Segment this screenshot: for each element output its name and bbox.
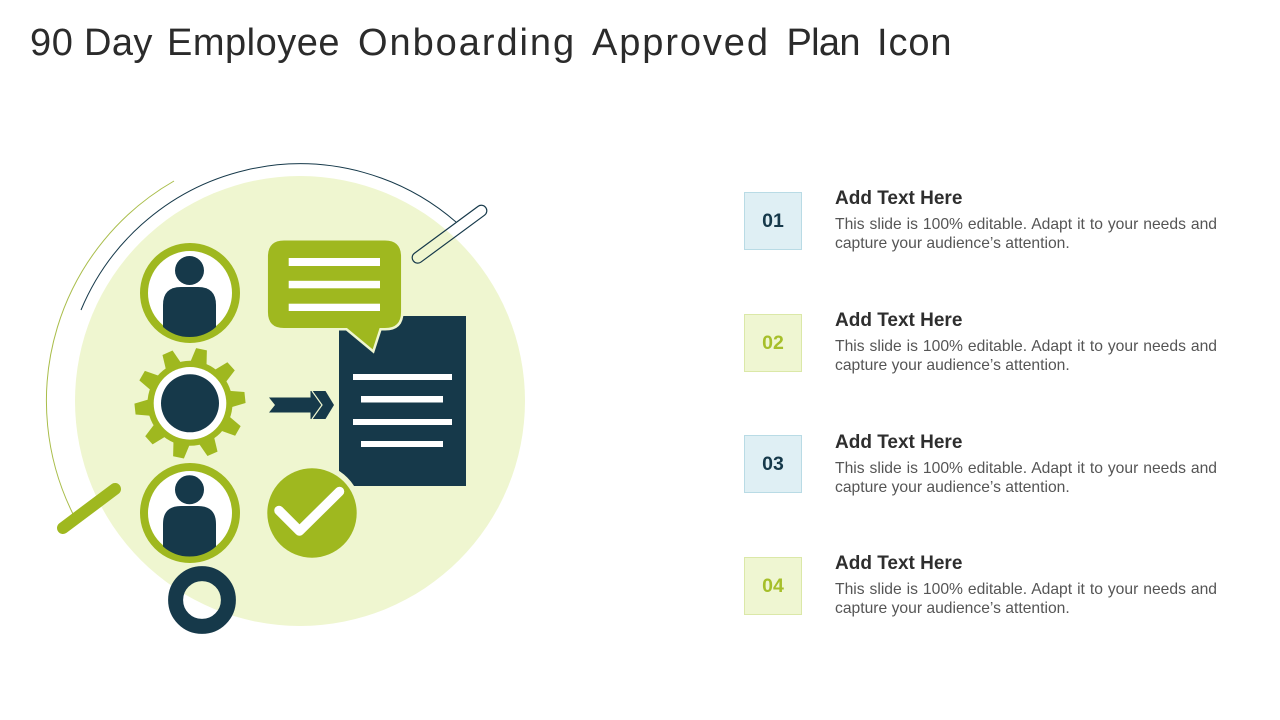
text block 04: capture your audience’s attention. [835,600,1070,617]
document [339,316,466,486]
text block 03: This slide is 100% editable. Adapt it to your needs and [835,460,1217,477]
outer navy arc [81,164,456,310]
title: Approved [592,22,770,64]
text block 03: Add Text Here [835,432,962,453]
number box 02: 02 [762,332,784,354]
navy ring [176,574,228,626]
number box 03: 03 [762,453,784,475]
text block 03 [835,432,1217,496]
title: Day [84,22,153,64]
illustration: onboarding plan icon [46,163,525,634]
outer green arc [46,181,174,514]
text block 01: This slide is 100% editable. Adapt it to your needs and [835,216,1217,233]
number box 02 [744,314,802,372]
text block 01: capture your audience’s attention. [835,235,1070,252]
check badge [262,463,362,563]
text block 03: capture your audience’s attention. [835,479,1070,496]
number box 04: 04 [762,575,784,597]
title: Employee [167,22,340,64]
green capsule [63,489,115,528]
number box 01: 01 [762,210,784,232]
person icon top [144,247,236,339]
person icon bottom [144,467,236,559]
background circle [75,176,525,626]
title: Icon [877,22,952,64]
text block 01 [835,188,1217,252]
speech bubble [267,239,402,352]
text block 02: This slide is 100% editable. Adapt it to your needs and [835,338,1217,355]
title: Plan [786,22,860,64]
number box 03 [744,435,802,493]
gear icon [134,347,246,459]
text block 01: Add Text Here [835,188,962,209]
title [30,22,952,64]
arrow [269,391,334,419]
text block 04: This slide is 100% editable. Adapt it to your needs and [835,581,1217,598]
outlined capsule [410,203,489,265]
title: 90 [30,22,73,64]
text block 02 [835,310,1217,374]
text block 04 [835,553,1217,617]
text block 02: Add Text Here [835,310,962,331]
title: Onboarding [358,22,576,64]
text block 02: capture your audience’s attention. [835,357,1070,374]
number box 04 [744,557,802,615]
number box 01 [744,192,802,250]
text block 04: Add Text Here [835,553,962,574]
